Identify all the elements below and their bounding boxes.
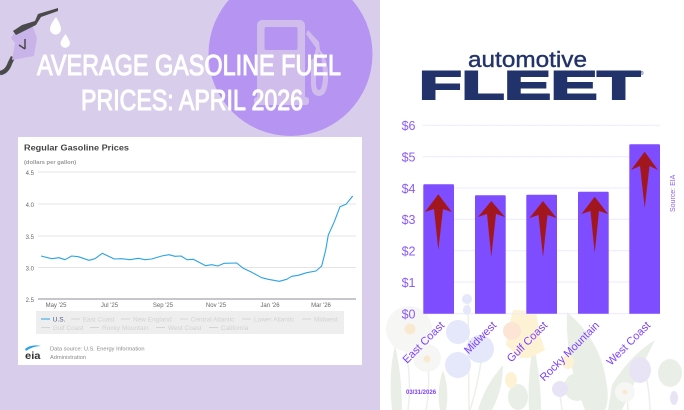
- x axis labels: East Coast: [401, 320, 447, 366]
- icon: fuel nozzle with drops: [0, 8, 70, 73]
- chart legend: New England: [133, 316, 172, 324]
- chart legend: Rocky Mountain: [102, 325, 149, 332]
- line chart: 4.0: [26, 203, 35, 209]
- logo: Automotive Fleet: FLEET: [419, 64, 640, 108]
- chart legend: East Coast: [83, 316, 115, 324]
- chart legend: Midwest: [314, 316, 338, 324]
- chart legend: Central Atlantic: [191, 316, 235, 324]
- bar chart: regional gasoline prices: [401, 119, 677, 396]
- x axis labels: West Coast: [605, 320, 653, 368]
- y axis labels: $3: [402, 213, 416, 227]
- chart legend: California: [221, 325, 249, 332]
- line chart: Mar '26: [311, 303, 332, 309]
- line chart: Jan '26: [260, 303, 280, 309]
- data source note: Data source: U.S. Energy Information: [50, 346, 145, 352]
- x axis labels: Gulf Coast: [505, 320, 550, 365]
- icon: EIA logo: [25, 345, 41, 362]
- y axis labels: [402, 119, 416, 322]
- line chart: Jul '25: [101, 303, 119, 309]
- y axis labels: $4: [402, 182, 416, 196]
- title: PRICES: APRIL 2026: [81, 85, 303, 117]
- y axis labels: $6: [402, 119, 416, 133]
- line chart: Nov '25: [206, 303, 227, 309]
- y axis labels: $0: [402, 308, 416, 322]
- source note: Source: EIA: [670, 174, 677, 212]
- icon: EIA logo: eia: [25, 350, 41, 362]
- bars: [423, 144, 660, 314]
- line chart: Sep '25: [153, 303, 174, 309]
- arrows: price increases: [425, 152, 658, 257]
- chart legend: [36, 311, 344, 334]
- y axis labels: $5: [402, 150, 416, 164]
- data source note: [50, 346, 145, 361]
- line chart: May '25: [46, 303, 67, 309]
- decorative floral watermark: [386, 294, 682, 410]
- y axis labels: $1: [402, 276, 416, 290]
- line chart: 4.5: [26, 171, 35, 177]
- chart legend: U.S.: [53, 316, 66, 324]
- x axis labels: Rocky Mountain: [538, 320, 602, 384]
- icon: purple circle with fuel pump: [208, 0, 372, 136]
- panel: right white background: [380, 0, 684, 410]
- date stamp: 03/31/2026: [406, 390, 437, 396]
- chart heading: Regular Gasoline Prices: [24, 142, 129, 152]
- x axis labels: Midwest: [462, 320, 499, 357]
- logo: Automotive Fleet: [419, 47, 644, 108]
- chart units: (dollars per gallon): [24, 160, 76, 166]
- line chart: 3.0: [26, 266, 35, 272]
- line chart: 2.5: [26, 298, 35, 304]
- panel: left lilac background: [0, 0, 380, 410]
- title: [37, 50, 341, 117]
- logo: Automotive Fleet: automotive: [468, 47, 587, 72]
- logo: Automotive Fleet: ®: [640, 70, 644, 77]
- chart legend: Gulf Coast: [53, 325, 84, 332]
- x axis labels: [401, 320, 653, 384]
- y axis labels: $2: [402, 244, 416, 258]
- line chart: 3.5: [26, 235, 35, 241]
- line chart: [26, 171, 356, 309]
- panel: EIA line chart card: [18, 137, 362, 365]
- chart legend: West Coast: [168, 325, 202, 332]
- title: AVERAGE GASOLINE FUEL: [37, 50, 341, 82]
- chart legend: Lower Atlantic: [254, 316, 295, 324]
- data source note: Administration: [50, 355, 86, 361]
